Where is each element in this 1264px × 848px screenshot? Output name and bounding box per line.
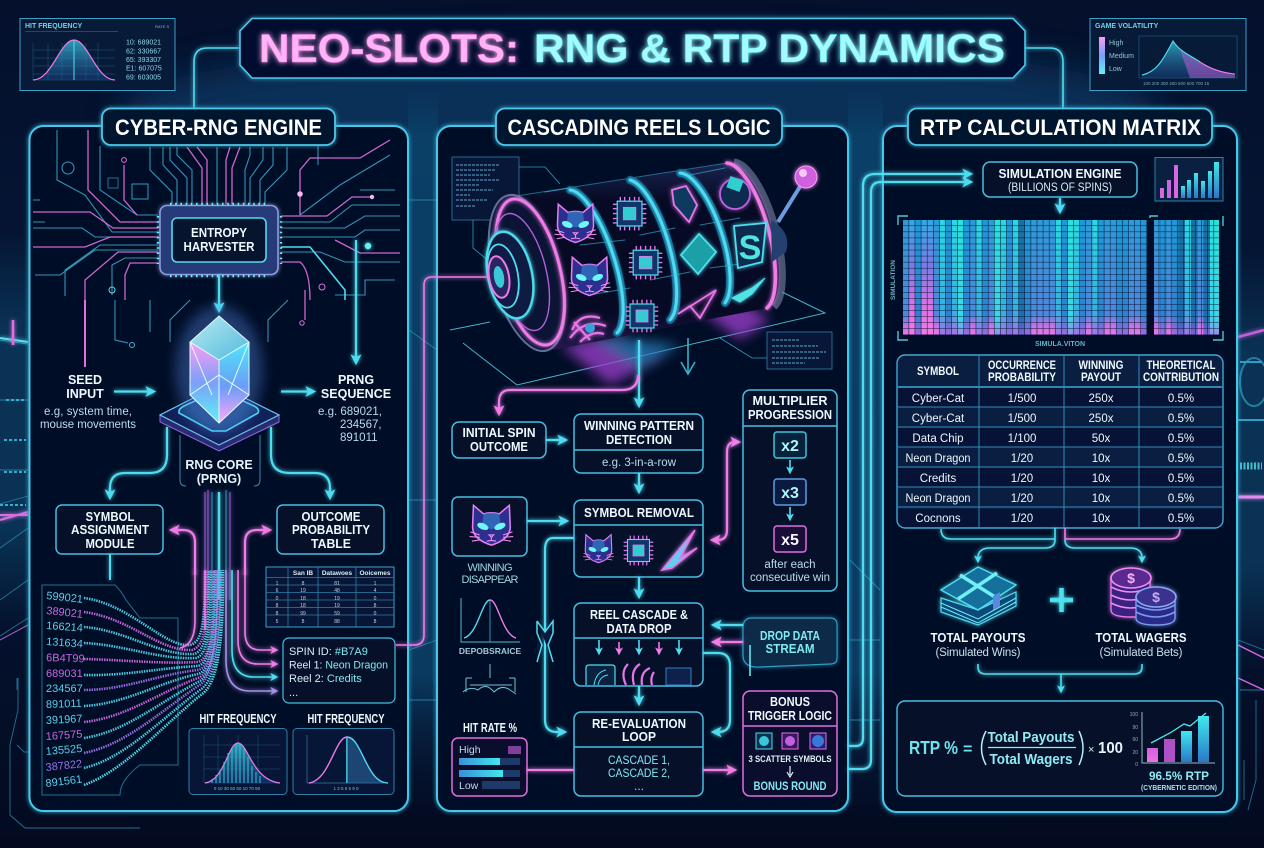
payout table: CONTRIBUTION: [1143, 372, 1219, 384]
panel heading: CYBER-RNG ENGINE: [115, 115, 322, 140]
prng sequence label: 234567,: [340, 419, 382, 431]
multiplier progression: consecutive win: [750, 572, 830, 584]
simulation engine box: SIMULATION ENGINE: [998, 167, 1122, 181]
hit rate chart: [452, 721, 527, 796]
arrow: removal to multiplier: [713, 442, 738, 540]
prng sequence label: e.g. 689021,: [318, 406, 382, 418]
icon: plus: [1050, 588, 1073, 612]
chart: dependence curve: DEPOBSRAICE: [459, 646, 522, 656]
payout table: Data Chip: [912, 433, 964, 445]
total payouts label: [930, 631, 1026, 659]
total wagers label: [1096, 631, 1186, 659]
connector: reel hub to spin record: [396, 277, 489, 645]
rtp formula box: [897, 701, 1223, 796]
spin record: SPIN ID: #B7A9: [289, 646, 368, 658]
reel cascade and data drop: REEL CASCADE &: [590, 608, 688, 622]
prng sequence label: PRNG: [338, 373, 374, 387]
random number stream: 167575: [45, 728, 83, 743]
arrow: removal loop to re-evaluation: [545, 538, 574, 732]
payout table: OCCURRENCE: [988, 360, 1056, 372]
mini dashboard: game volatility: High: [1109, 40, 1124, 47]
arrow: initial to detection: [546, 439, 565, 441]
chart: hit frequency bars: 0 10 30 50 60 10 70 50: [214, 786, 261, 791]
total payouts label: (Simulated Wins): [936, 647, 1021, 659]
mini dashboard: game volatility: Low: [1109, 66, 1123, 73]
random number stream: 166214: [46, 620, 83, 635]
mini bar chart: [1155, 158, 1223, 201]
multiplier progression: [743, 390, 837, 591]
note panel: lower spec: [720, 332, 832, 369]
payout table: 1/500: [1008, 393, 1036, 405]
chart: hit frequency curve: [293, 712, 394, 794]
arrows: trunk to spin record: [180, 570, 276, 691]
outcome table: 0: [374, 596, 377, 602]
prng sequence label: 891011: [340, 432, 378, 444]
outcome table: 8: [302, 581, 305, 587]
panel: RTP calculation matrix: [848, 108, 1237, 812]
re-evaluation loop: CASCADE 2,: [608, 766, 670, 780]
initial spin outcome: [452, 422, 546, 458]
small waveform: [463, 664, 516, 694]
payout table: Credits: [920, 473, 956, 485]
simulation heatmap: SIMULA.VITON: [1035, 341, 1085, 348]
rtp bar chart: (CYBERNETIC EDITION): [1141, 785, 1217, 792]
spin record: ...: [289, 687, 298, 699]
slot reel: S: [739, 229, 761, 267]
simulation heatmap: [890, 216, 1223, 348]
seed input label: SEED: [68, 373, 102, 387]
outcome table: 81: [334, 581, 340, 587]
bonus trigger logic: BONUS ROUND: [754, 781, 826, 793]
arrow: feedback to symbol module: [172, 530, 195, 575]
mini dashboard: hit frequency: 65: 393307: [126, 57, 161, 64]
arrow: engine to heatmap: [1059, 198, 1061, 211]
outcome table: 19: [300, 588, 306, 594]
rtp bar chart: 0: [1135, 762, 1138, 768]
payout table: 10x: [1092, 493, 1111, 505]
panel frame: [437, 126, 848, 811]
rtp bar chart: 60: [1132, 737, 1138, 743]
winning pattern detection: [574, 414, 703, 473]
seed input label: mouse movements: [40, 419, 136, 431]
random number stream: 131634: [46, 636, 83, 651]
outcome table: 19: [334, 603, 340, 609]
hit rate chart: HIT RATE %: [463, 721, 517, 735]
mini dashboard: hit frequency: RATE S: [155, 24, 169, 29]
outcome table: 8: [276, 611, 279, 617]
payout table: 250x: [1089, 413, 1114, 425]
mini dashboard: hit frequency: [20, 18, 175, 90]
re-evaluation loop: LOOP: [622, 730, 656, 744]
arrow: cascade to re-evaluation: [638, 686, 640, 703]
random number stream: 387822: [45, 758, 83, 774]
rng core label: [180, 435, 260, 486]
arrow: core to sequence: [281, 390, 313, 393]
outcome probability box: OUTCOME: [302, 510, 360, 524]
payout table: 0.5%: [1168, 413, 1194, 425]
icon: coin stacks: $: [1127, 570, 1135, 586]
payout table: 10x: [1092, 513, 1111, 525]
winning pattern detection: DETECTION: [606, 433, 672, 447]
outcome table: Ooicemes: [359, 570, 391, 577]
mini dashboard: hit frequency: 62: 330667: [126, 48, 161, 56]
symbol assignment module: [56, 505, 163, 554]
outcome table: 8: [374, 603, 377, 609]
symbol assignment module: SYMBOL: [86, 510, 135, 524]
rtp bar chart: 96.5% RTP: [1149, 769, 1209, 783]
multiplier progression: x3: [781, 485, 799, 502]
winning disappear: DISAPPEAR: [462, 574, 519, 586]
outcome table: 18: [300, 596, 306, 602]
panel frame: [30, 126, 408, 811]
outcome probability box: PROBABILITY: [292, 523, 371, 537]
entropy harvester chip: HARVESTER: [184, 240, 254, 254]
arrow: data stream to cascade (pink): [714, 641, 743, 643]
outcome table: 18: [300, 603, 306, 609]
formula: =: [963, 741, 972, 758]
icon: money stack: [941, 567, 1016, 625]
arrow: disappear to removal: [527, 520, 566, 522]
reel cascade and data drop: DATA DROP: [606, 622, 672, 636]
symbol removal: SYMBOL REMOVAL: [584, 506, 694, 520]
total payouts label: TOTAL PAYOUTS: [930, 631, 1026, 645]
random number stream: 135525: [45, 743, 83, 758]
payout table: Cocnons: [915, 513, 961, 525]
outcome table: 1: [276, 581, 279, 587]
formula: Total Payouts: [988, 729, 1074, 746]
payout table: 1/20: [1011, 513, 1033, 525]
prng sequence label: [318, 373, 391, 444]
spin record: Reel 2: Credits: [289, 673, 362, 685]
formula: RTP %: [909, 738, 958, 758]
connector: table to wagers: [1065, 528, 1180, 540]
arrow: reel to detection: [638, 340, 640, 405]
panel heading: RTP CALCULATION MATRIX: [920, 115, 1201, 140]
payout table: 0.5%: [1168, 453, 1194, 465]
symbol assignment module: MODULE: [86, 537, 134, 551]
payout table: 50x: [1092, 433, 1111, 445]
outcome table: 48: [334, 588, 340, 594]
rtp bar chart: [1130, 712, 1217, 792]
formula: [909, 729, 1123, 768]
icon: coin stacks: $: [1152, 589, 1160, 605]
drop data stream: [743, 618, 837, 676]
rng core label: (PRNG): [197, 472, 241, 486]
icon: coin stacks: [1111, 568, 1176, 625]
panel heading: [496, 108, 782, 145]
payout table: SYMBOL: [917, 366, 959, 378]
random number stream: 689031: [46, 668, 83, 680]
rng crystal: [160, 306, 279, 451]
arrow: reel to initial outcome: [499, 375, 638, 413]
note panel: reel spec: [452, 157, 560, 262]
outcome table: [266, 567, 394, 627]
multiplier progression: after each: [764, 559, 816, 571]
initial spin outcome: OUTCOME: [470, 440, 528, 454]
formula: Total Wagers: [990, 751, 1072, 768]
arrow: detection to removal: [638, 473, 640, 491]
panel heading: CASCADING REELS LOGIC: [508, 115, 771, 140]
payout table: 1/20: [1011, 493, 1033, 505]
multiplier progression: x5: [781, 532, 799, 549]
chart: hit frequency bars: [189, 712, 287, 794]
mini dashboard: game volatility: GAME VOLATILITY: [1095, 23, 1159, 30]
formula: 100: [1098, 740, 1123, 757]
payout table: 10x: [1092, 473, 1111, 485]
rtp bar chart: 100: [1130, 712, 1138, 718]
simulation heatmap: SIMULATION: [890, 260, 897, 300]
total wagers label: TOTAL WAGERS: [1096, 631, 1186, 645]
outcome table: 1: [374, 581, 377, 587]
chart: dependence curve: [459, 598, 522, 656]
bonus trigger logic: 3 SCATTER SYMBOLS: [748, 754, 832, 764]
symbol assignment module: ASSIGNMENT: [71, 523, 149, 537]
connector: wagers arrow: [1065, 540, 1142, 561]
payout table: 1/500: [1008, 413, 1036, 425]
arrow: core to probability table: [271, 427, 330, 497]
payout table: 10x: [1092, 453, 1111, 465]
arrow: chip to core: [218, 275, 220, 310]
rng core label: RNG CORE: [185, 458, 253, 472]
outcome table: 19: [334, 596, 340, 602]
outcome table: 0: [374, 611, 377, 617]
outcome probability box: TABLE: [311, 537, 351, 551]
outcome table: 8: [374, 619, 377, 625]
seed input label: e.g, system time,: [44, 406, 132, 418]
title: [240, 18, 1025, 78]
outcome table: Datawoes: [322, 570, 353, 577]
payout table: [897, 355, 1223, 528]
arrow: cascade loop to re-evaluation: [703, 653, 730, 732]
chart: hit frequency curve: HIT FREQUENCY: [308, 712, 385, 726]
random number stream: [45, 570, 223, 790]
payout table: 1/20: [1011, 473, 1033, 485]
slot reel: [475, 162, 817, 385]
hit rate chart: High: [459, 744, 481, 756]
payout table: Neon Dragon: [906, 453, 970, 465]
payout table: 1/100: [1008, 433, 1036, 445]
data panel outline: [42, 585, 178, 795]
connector: loop to simulation engine (lower): [848, 182, 970, 769]
connector: table to payouts: [941, 528, 1055, 561]
multiplier progression: MULTIPLIER: [752, 394, 828, 408]
payout table: PROBABILITY: [988, 372, 1056, 384]
prng sequence label: SEQUENCE: [321, 387, 391, 401]
random number stream: 389021: [46, 605, 83, 621]
outcome table: San IB: [293, 570, 313, 577]
outcome table: 5: [276, 619, 279, 625]
mini dashboard: hit frequency: E1: 607075: [126, 66, 162, 72]
bracket arrow: totals to formula: [978, 664, 1142, 691]
mini dashboard: hit frequency: 10: 689021: [126, 40, 161, 46]
entropy harvester chip: ENTROPY: [191, 226, 248, 240]
seed input label: [40, 373, 136, 431]
random number stream: 599021: [46, 590, 83, 606]
arrow: feedback to probability table: [245, 530, 269, 575]
mini dashboard: game volatility: 100 200 300 400 500 600 700 15: [1143, 81, 1210, 86]
random number stream: 891561: [45, 774, 83, 790]
title: NEO-SLOTS:: [259, 27, 519, 71]
panel frame: [883, 126, 1237, 812]
chart: hit frequency curve: 1 2 5 6 5 9 0: [333, 786, 359, 791]
mini dashboard: hit frequency: HIT FREQUENCY: [25, 23, 82, 30]
drop data stream: STREAM: [766, 642, 814, 656]
entropy harvester chip: [158, 204, 281, 276]
payout table: 0.5%: [1168, 513, 1194, 525]
spin record: Reel 1: Neon Dragon: [289, 660, 388, 672]
payout table: PAYOUT: [1081, 372, 1121, 384]
data trunk lines: [110, 490, 230, 600]
multiplier progression: x2: [781, 438, 799, 455]
payout table: THEORETICAL: [1146, 360, 1216, 372]
multiplier progression: PROGRESSION: [748, 408, 832, 422]
panel: cascading reels logic: [396, 108, 848, 811]
re-evaluation loop: [574, 712, 703, 796]
total wagers label: (Simulated Bets): [1100, 647, 1183, 659]
outcome table: 8: [276, 603, 279, 609]
outcome table: 0: [276, 596, 279, 602]
outcome probability box: [277, 505, 384, 554]
circuit traces: [33, 130, 400, 367]
platform: [450, 292, 825, 385]
payout table: Cyber-Cat: [912, 413, 965, 425]
payout table: 0.5%: [1168, 473, 1194, 485]
line: hit rate to loop: [527, 769, 574, 771]
connector: loop to simulation engine (upper): [848, 174, 970, 746]
panel: cyber-RNG engine: [30, 108, 408, 811]
payout table: 1/20: [1011, 453, 1033, 465]
outcome table: 6: [276, 588, 279, 594]
hit rate chart: Low: [459, 780, 479, 792]
rtp bar chart: 20: [1132, 750, 1138, 756]
winning pattern detection: e.g. 3-in-a-row: [602, 457, 677, 469]
initial spin outcome: INITIAL SPIN: [462, 426, 536, 440]
random number stream: 891011: [46, 698, 82, 711]
title: RNG & RTP DYNAMICS: [534, 27, 1005, 71]
random number stream: 6B4T99: [46, 652, 85, 665]
arrow: circuit to sequence: [355, 240, 357, 362]
arrow: removal to cascade: [638, 577, 640, 596]
panel heading: [102, 108, 335, 145]
reel cascade and data drop: [574, 603, 703, 686]
bonus trigger logic: TRIGGER LOGIC: [748, 709, 832, 723]
arrow: data stream to cascade (cyan): [714, 624, 743, 626]
small down arrow decoration: [681, 338, 695, 374]
panel heading: [908, 108, 1212, 145]
bonus trigger logic: [743, 691, 837, 796]
payout table: 0.5%: [1168, 393, 1194, 405]
outcome table: 4: [374, 588, 377, 594]
arrow: loop to bonus: [703, 769, 734, 771]
random number stream: 391967: [46, 713, 83, 727]
outcome table: 59: [334, 611, 340, 617]
rtp bar chart: 90: [1132, 725, 1138, 731]
winning disappear: [452, 497, 527, 586]
reel end cap and hub: [475, 187, 579, 359]
seed input label: INPUT: [66, 387, 104, 401]
re-evaluation loop: RE-EVALUATION: [592, 717, 686, 731]
mini dashboard: game volatility: Medium: [1109, 53, 1134, 60]
outcome table: 8: [302, 619, 305, 625]
payout table: WINNING: [1078, 360, 1124, 372]
connector: title to left panel: [194, 48, 240, 108]
simulation engine box: (BILLIONS OF SPINS): [1008, 182, 1112, 194]
payout table: Neon Dragon: [906, 493, 970, 505]
random number stream: 234567: [46, 683, 83, 695]
spin record: [283, 638, 395, 703]
payout table: 250x: [1089, 393, 1114, 405]
payout table: Cyber-Cat: [912, 393, 965, 405]
crossing marker: [537, 621, 553, 662]
arrow: seed to core: [114, 390, 153, 393]
chart: hit frequency bars: HIT FREQUENCY: [200, 712, 277, 726]
connector: title to right panel: [1025, 48, 1063, 108]
payout table: 0.5%: [1168, 433, 1194, 445]
formula: ×: [1088, 744, 1094, 756]
bonus trigger logic: BONUS: [770, 695, 810, 709]
drop data stream: DROP DATA: [760, 629, 820, 643]
simulation engine box: [983, 162, 1137, 197]
outcome table: 99: [300, 611, 306, 617]
re-evaluation loop: CASCADE 1,: [608, 753, 670, 767]
arrow: core to symbol module: [110, 427, 167, 497]
payout table: 0.5%: [1168, 493, 1194, 505]
winning disappear: WINNING: [468, 562, 512, 574]
outcome table: 88: [334, 619, 340, 625]
re-evaluation loop: ...: [634, 779, 644, 793]
mini dashboard: game volatility: [1090, 18, 1246, 90]
symbol removal: [574, 500, 703, 577]
mini dashboard: hit frequency: 69: 603005: [126, 74, 161, 82]
winning pattern detection: WINNING PATTERN: [584, 419, 694, 433]
